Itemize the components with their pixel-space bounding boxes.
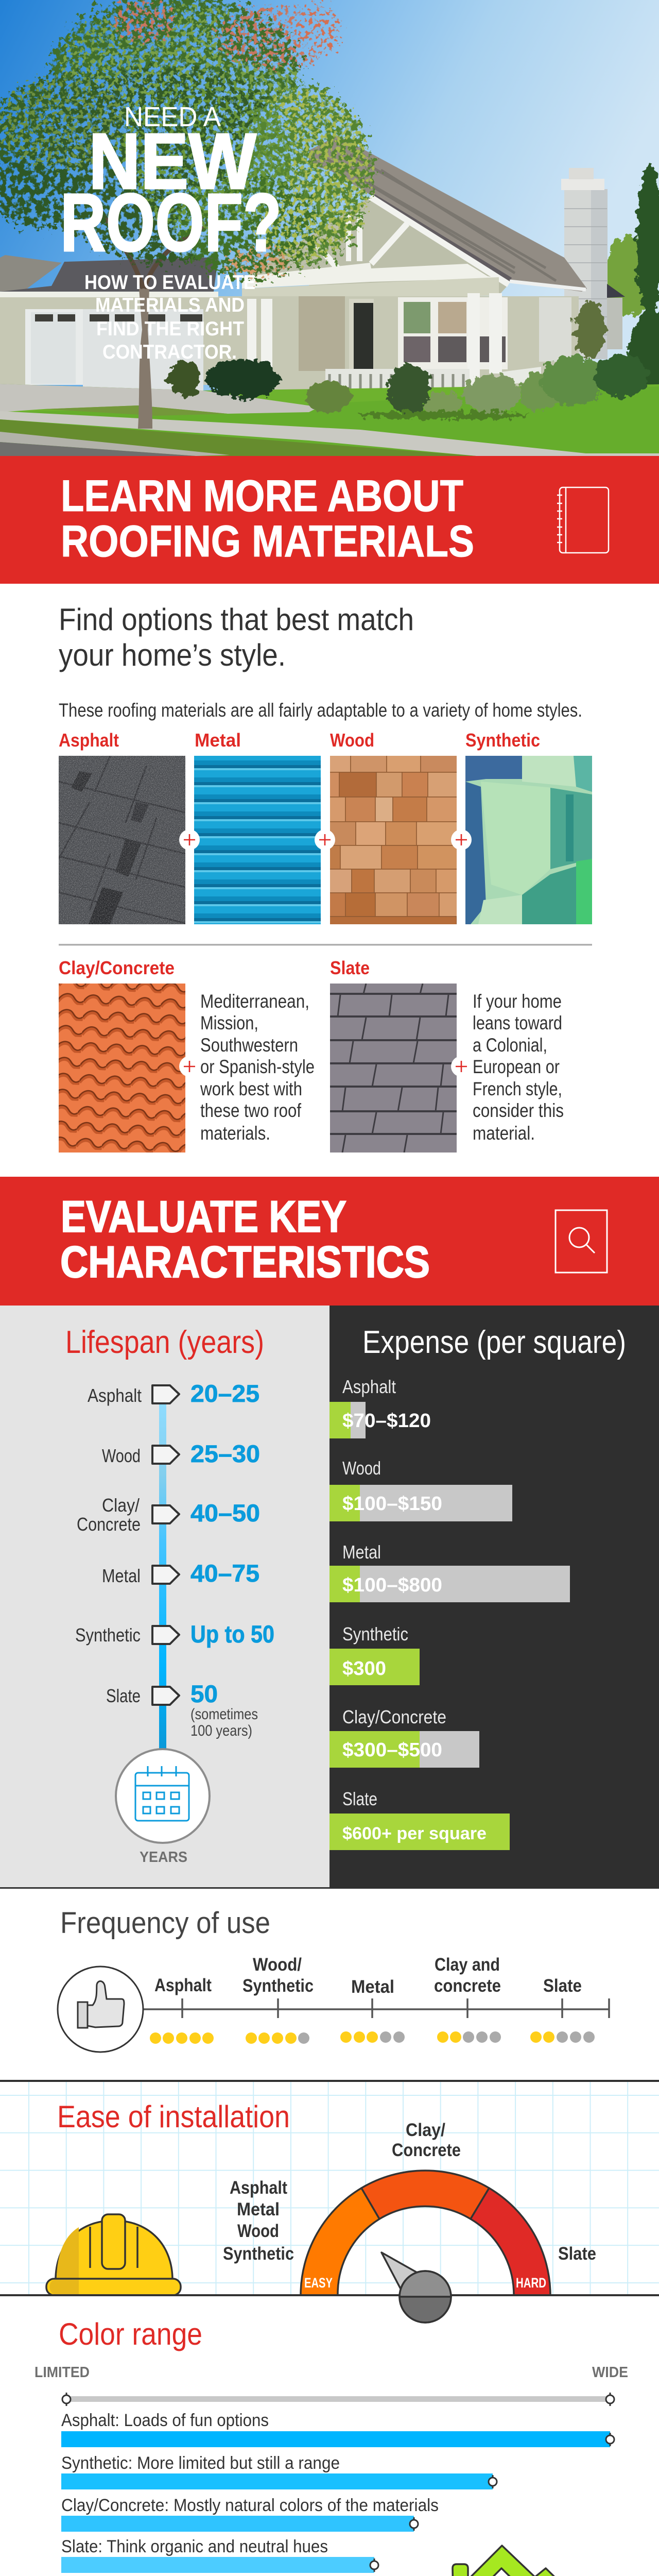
panel: roofing materials by style: Synthetic — [465, 730, 540, 751]
timeline values: Up to 50 — [190, 1620, 274, 1648]
photo: wood shakes — [330, 756, 457, 924]
text: clay and concrete styles: Mediterranean, — [200, 991, 309, 1012]
hero title: NEW — [89, 117, 257, 206]
text: slate styles — [473, 991, 564, 1144]
panel: roofing materials by style: Find options that best match — [59, 602, 414, 637]
icon: magnifier — [556, 1210, 607, 1273]
text: clay and concrete styles: these two roof — [200, 1100, 302, 1121]
icon: hard hat — [46, 2214, 181, 2295]
house wall, windows and door — [218, 296, 579, 399]
timeline markers — [152, 1385, 179, 1705]
frequency labels — [154, 1955, 582, 1997]
bar: asphalt: $70–$120 — [342, 1410, 431, 1432]
panel: lifespan: Lifespan (years) — [65, 1325, 264, 1360]
bar: slate colors — [61, 2537, 374, 2573]
icon: calendar — [116, 1749, 210, 1843]
text: clay and concrete styles: materials. — [200, 1123, 270, 1144]
panel: roofing materials by style — [59, 602, 592, 1153]
timeline labels: Concrete — [77, 1514, 141, 1535]
timeline labels: Asphalt — [88, 1385, 142, 1406]
section banner: evaluate key characteristics: CHARACTERISTICS — [60, 1238, 430, 1287]
bar: synthetic: Synthetic — [342, 1623, 408, 1645]
bar: asphalt — [330, 1376, 431, 1438]
panel: expense — [330, 1306, 659, 1889]
shrubs — [167, 301, 648, 419]
panel: ease of installation: Ease of installation — [57, 2099, 290, 2134]
frequency labels: Wood/ — [253, 1955, 302, 1975]
photo: clay tiles — [59, 984, 185, 1153]
porch posts — [467, 293, 480, 414]
frequency labels: Clay and — [435, 1955, 500, 1975]
panel: roofing materials by style: Metal — [195, 730, 241, 751]
timeline labels: Clay/ — [102, 1495, 140, 1516]
text: clay and concrete styles: Mission, — [200, 1012, 258, 1033]
bar: metal — [330, 1541, 570, 1602]
section banner: learn more about roofing materials: ROOFING MATERIALS — [61, 517, 474, 566]
hero title: HOW TO EVALUATE — [84, 272, 255, 294]
bar: synthetic colors: Synthetic: More limited but still a range — [61, 2453, 340, 2473]
photo: synthetic tiles — [465, 756, 592, 924]
bar: synthetic: $300 — [342, 1658, 386, 1680]
gauge — [301, 2171, 550, 2323]
bar: clay and concrete — [330, 1706, 479, 1768]
text: clay and concrete styles: work best with — [200, 1078, 302, 1099]
bar: synthetic — [330, 1623, 420, 1685]
bar: asphalt: Asphalt — [342, 1376, 396, 1397]
timeline values: 20–25 — [190, 1380, 259, 1407]
photo: asphalt shingles — [59, 756, 185, 924]
timeline labels: Synthetic — [75, 1624, 141, 1646]
panel: roofing materials by style: your home’s style. — [59, 638, 286, 672]
divider — [59, 944, 592, 946]
gauge labels: Clay/ — [406, 2120, 445, 2140]
frequency labels: Metal — [351, 1977, 394, 1997]
photo: slate tiles — [330, 984, 457, 1153]
main roof — [309, 135, 587, 292]
plus badges — [179, 829, 472, 1077]
bar: clay and concrete: $300–$500 — [342, 1739, 442, 1761]
panel: color range: Color range — [59, 2317, 202, 2351]
panel: frequency of use: Frequency of use — [60, 1906, 270, 1940]
chimney — [561, 168, 608, 359]
section banner: learn more about roofing materials: LEARN MORE ABOUT — [61, 471, 463, 521]
hero title: NEED A — [124, 101, 221, 132]
gauge labels: Slate — [558, 2244, 596, 2264]
text: clay and concrete styles — [200, 991, 315, 1144]
panel: ease of installation: EASY — [304, 2275, 333, 2291]
section banner: evaluate key characteristics — [0, 1177, 659, 1306]
gauge labels: Asphalt — [230, 2178, 287, 2198]
panel: color range: LIMITED — [34, 2364, 90, 2381]
bar: synthetic colors — [61, 2453, 493, 2489]
gauge labels: Wood — [237, 2221, 279, 2241]
hero photo: house and tree — [0, 0, 659, 456]
gauge labels — [223, 2120, 596, 2264]
timeline labels: Wood — [102, 1445, 141, 1466]
icon: notebook — [557, 487, 609, 553]
hero title: ROOF? — [60, 176, 282, 268]
hero title: FIND THE RIGHT — [96, 318, 244, 340]
text: clay and concrete styles: Southwestern — [200, 1035, 298, 1056]
slider markers — [62, 2393, 614, 2576]
frequency labels: Synthetic — [242, 1976, 314, 1996]
gauge labels: Concrete — [392, 2140, 461, 2160]
text: slate styles: European or — [473, 1056, 560, 1077]
text: slate styles: leans toward — [473, 1012, 562, 1033]
icon: house with green roof — [421, 2546, 603, 2576]
text: slate styles: material. — [473, 1123, 535, 1144]
panel: lifespan: 100 years) — [190, 1722, 252, 1739]
icon: thumbs up — [58, 1967, 143, 2052]
hero title: MATERIALS AND — [95, 294, 245, 316]
bar: slate: $600+ per square — [342, 1824, 487, 1843]
timeline bar — [159, 1403, 166, 1754]
text: slate styles: If your home — [473, 991, 562, 1012]
gauge labels: Metal — [237, 2199, 280, 2219]
panel: roofing materials by style: Slate — [330, 957, 370, 978]
panel: ease of installation: HARD — [516, 2275, 546, 2291]
hero title — [60, 101, 282, 363]
panel: color range — [34, 2317, 628, 2576]
gable face — [247, 197, 509, 297]
panel: color range: WIDE — [592, 2364, 628, 2381]
text: clay and concrete styles: or Spanish-style — [200, 1056, 315, 1077]
bar: metal: Metal — [342, 1541, 381, 1563]
bar: slate colors: Slate: Think organic and neutral hues — [61, 2537, 328, 2556]
background trees — [604, 165, 659, 389]
hero title: CONTRACTOR. — [102, 341, 237, 363]
panel: lifespan: YEARS — [140, 1849, 187, 1866]
photo: blue metal roofing — [194, 756, 321, 924]
bar: asphalt colors — [61, 2411, 610, 2447]
bar: clay and concrete colors — [61, 2496, 439, 2532]
timeline values — [190, 1380, 274, 1707]
timeline values: 25–30 — [190, 1440, 260, 1467]
bar: clay and concrete: Clay/Concrete — [342, 1706, 446, 1727]
bar: clay and concrete colors: Clay/Concrete: Mostly natural colors of the materials — [61, 2496, 439, 2515]
garage — [0, 296, 247, 385]
panel: frequency of use — [58, 1906, 609, 2052]
bar: metal: $100–$800 — [342, 1574, 442, 1596]
timeline values: 40–50 — [190, 1499, 260, 1527]
panel: lifespan: (sometimes — [190, 1706, 258, 1723]
frequency labels: concrete — [434, 1976, 501, 1996]
timeline labels: Slate — [106, 1685, 141, 1706]
bar: slate — [330, 1788, 510, 1850]
timeline labels: Metal — [102, 1565, 141, 1586]
text: slate styles: consider this — [473, 1100, 564, 1121]
section banner: evaluate key characteristics: EVALUATE KEY — [61, 1192, 346, 1242]
frequency labels: Slate — [543, 1976, 582, 1996]
panel: roofing materials by style: Clay/Concrete — [59, 957, 175, 978]
tree canopy — [0, 0, 371, 279]
bar: slate: Slate — [342, 1788, 377, 1809]
bar: wood: $100–$150 — [342, 1493, 442, 1515]
panel: lifespan — [0, 1306, 330, 1889]
timeline labels — [75, 1385, 142, 1706]
rating dots — [150, 2031, 595, 2044]
panel: ease of installation — [0, 2080, 659, 2323]
frequency labels: Asphalt — [154, 1975, 212, 1995]
railings — [325, 369, 470, 408]
timeline values: 40–75 — [190, 1560, 259, 1587]
timeline values: 50 — [190, 1680, 218, 1707]
tree trunk — [98, 206, 206, 429]
panel: roofing materials by style: Asphalt — [59, 730, 119, 751]
ground: lawn, driveway, sidewalk, curb — [0, 384, 659, 456]
bar: wood — [330, 1458, 512, 1521]
gauge labels: Synthetic — [223, 2244, 294, 2264]
panel: roofing materials by style: Wood — [330, 730, 374, 751]
bar: asphalt colors: Asphalt: Loads of fun options — [61, 2411, 269, 2430]
section banner: learn more about roofing materials — [0, 456, 659, 584]
bar: wood: Wood — [342, 1458, 381, 1479]
text: slate styles: French style, — [473, 1078, 562, 1099]
text: slate styles: a Colonial, — [473, 1035, 547, 1056]
